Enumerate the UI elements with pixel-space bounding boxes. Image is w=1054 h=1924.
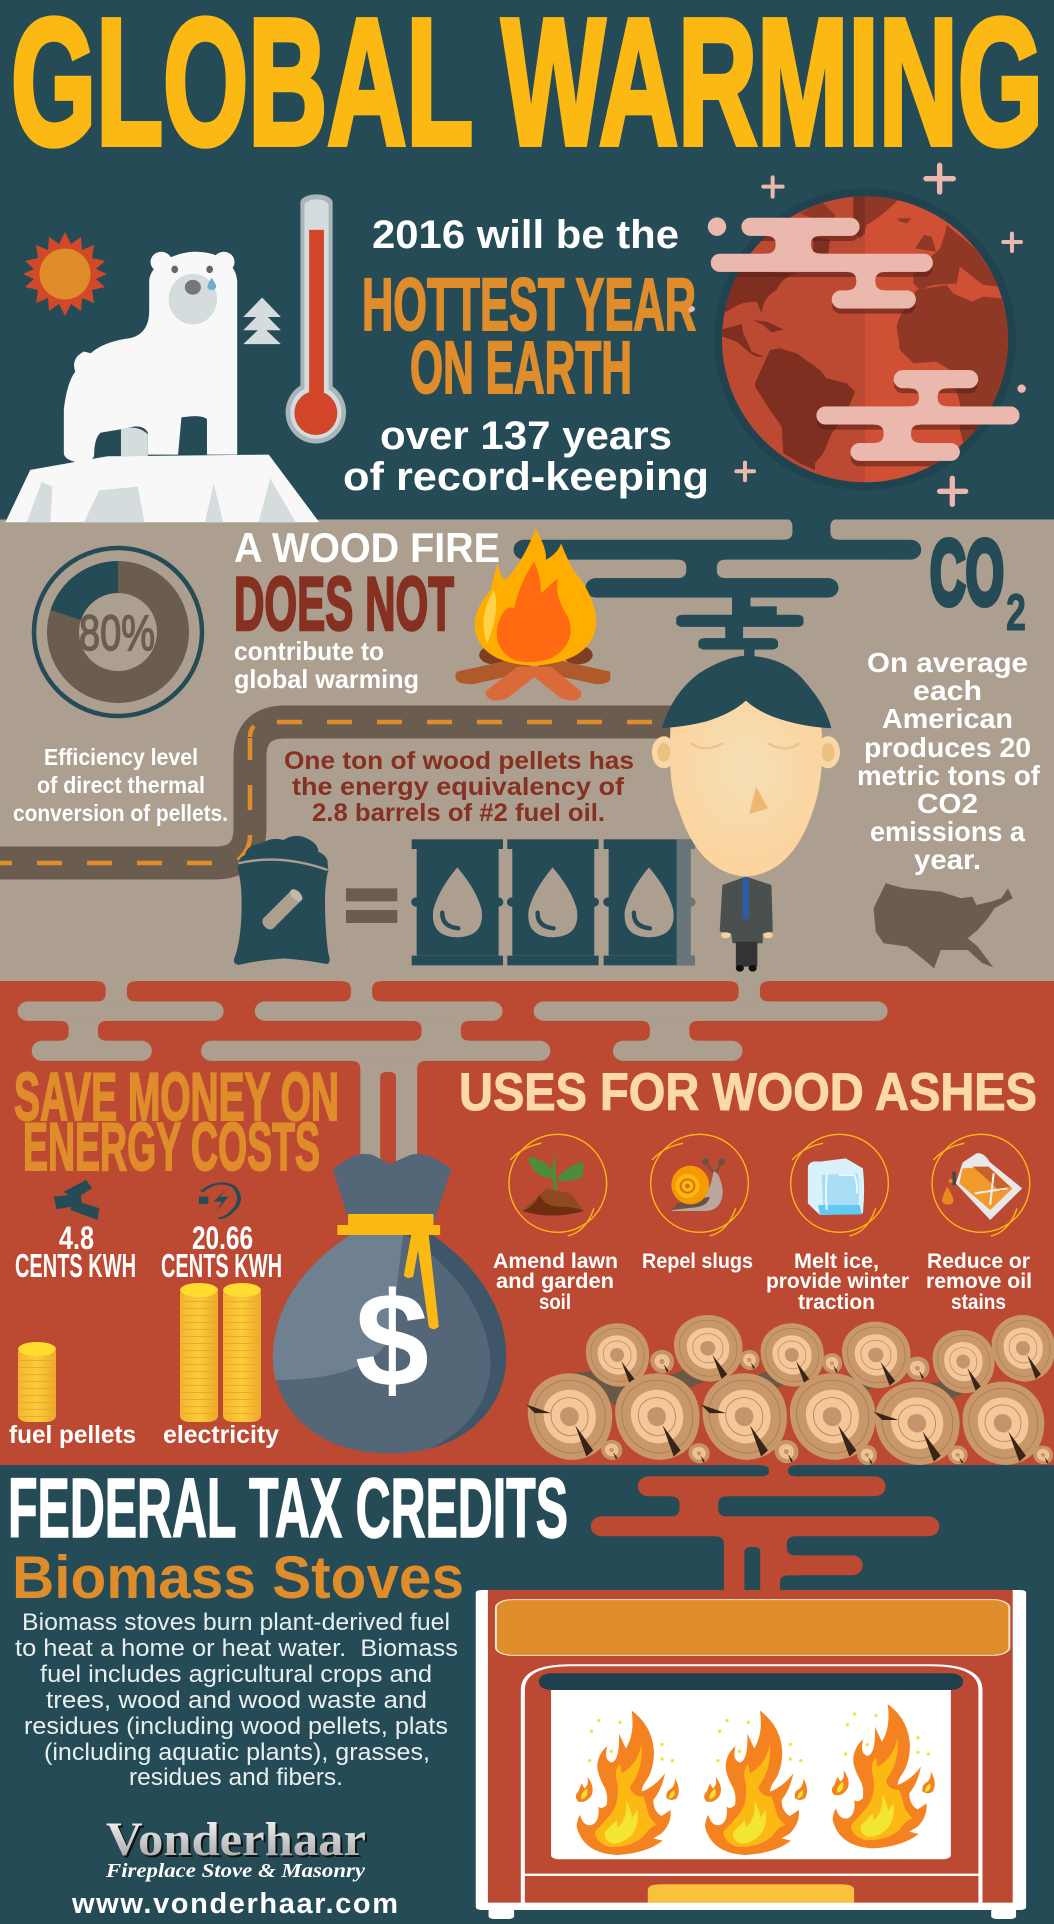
labels: wood ash uses: soil [539,1291,571,1314]
text: american emissions: metric tons of [857,760,1041,791]
labels: wood ash uses: Reduce or [927,1250,1030,1273]
text: biomass description: to heat a home or heat water. Biomass [15,1635,458,1662]
stat: pellet and electricity cost: CENTS KWH [161,1247,282,1284]
text: american emissions: produces 20 [864,732,1031,763]
icon: campfire [455,528,611,701]
small cloud dot [677,305,695,313]
text: american emissions: CO2 [917,788,978,819]
icon: polar bear on iceberg [5,252,319,522]
chart: 80% efficiency donut: 80% [79,605,155,661]
text: american emissions: On average [867,647,1028,678]
icon: biomass stove [476,1590,1026,1919]
text: biomass description: residues (including wood pellets, plats [24,1713,448,1740]
teal smoke rising from head [514,518,921,658]
heading: 2016 will be the hottest year: over 137 years [380,414,672,458]
text: efficiency level: Efficiency level [44,744,198,770]
labels: fuel pellets, electricity [9,1421,279,1449]
chart: 80% efficiency donut [34,548,202,716]
heading: 2016 will be the hottest year: ON EARTH [410,326,632,409]
text: biomass description: residues and fibers. [129,1764,343,1791]
icon: money bag [273,1154,506,1453]
stat: pellet and electricity cost: 20.66 [192,1220,253,1256]
dollar sign: $ [355,1266,429,1415]
icon: thermometer [286,194,346,443]
text: wood pellet equivalency: One ton of wood pellets has [284,747,634,775]
heading: CO2: 2 [1006,584,1026,642]
icon: wood log pile [526,1315,1054,1465]
labels: fuel pellets, electricity: electricity [163,1421,279,1449]
labels: wood ash uses: and garden [496,1270,614,1293]
labels: fuel pellets, electricity: fuel pellets [9,1421,136,1449]
icon: sprout [509,1134,607,1236]
heading: a wood fire does not: contribute to [234,636,384,666]
labels: wood ash uses: Repel slugs [642,1250,753,1273]
labels: wood ash uses: stains [951,1291,1006,1314]
icon: ice cube [791,1134,888,1236]
tan smoke into money bag [18,981,887,1163]
labels: wood ash uses: Amend lawn [493,1250,618,1273]
red smoke into stove [591,1465,939,1590]
heading: a wood fire does not: A WOOD FIRE [234,524,500,571]
heading: 2016 will be the hottest year: of record-keeping [343,455,709,499]
text: biomass description: fuel includes agricultural crops and [40,1661,432,1688]
stat: pellet and electricity cost: 4.8 [59,1220,94,1256]
icon: small pine tree [243,297,281,344]
text: american emissions: year. [914,844,981,875]
heading: save money on energy costs: SAVE MONEY ON [14,1059,339,1135]
heading: CO2 [930,522,1026,642]
logo: vonderhaar: Vonderhaar [108,1815,368,1868]
labels: wood ash uses [493,1250,1032,1314]
logo: vonderhaar: Fireplace Stove & Masonry [105,1860,365,1882]
heading: biomass stoves: Biomass Stoves [12,1544,464,1611]
icon: sun [23,232,107,316]
text: wood pellet equivalency: the energy equivalency of [292,773,625,801]
road [0,722,680,863]
labels: wood ash uses: remove oil [926,1270,1032,1293]
icon: pellet logs [54,1180,99,1220]
text: biomass description: Biomass stoves burn plant-derived fuel [22,1609,450,1636]
text: wood pellet equivalency [284,747,634,827]
chart: coin stacks [18,1283,261,1422]
icon: three flames in stove window [576,1704,935,1855]
heading: save money on energy costs: ENERGY COSTS [23,1109,320,1185]
text: efficiency level: conversion of pellets. [13,800,228,826]
icon: snail [651,1134,748,1236]
icon: man with smoke [652,656,840,972]
icon: bag of pellets [234,836,330,965]
text: efficiency level [13,744,228,826]
heading: 2016 will be the hottest year [343,213,709,499]
stat: pellet and electricity cost [15,1220,282,1284]
icon: plus-shaped stars [734,163,1023,507]
text: american emissions: each [913,675,982,706]
icon: globe with clouds [708,188,1026,490]
heading: a wood fire does not: global warming [234,664,419,694]
text: biomass description: trees, wood and wood waste and [46,1687,427,1714]
heading: save money on energy costs [14,1059,339,1185]
text: biomass description: (including aquatic plants), grasses, [44,1739,430,1766]
heading: a wood fire does not [234,524,500,694]
website url: www.vonderhaar.com [71,1888,398,1920]
text: american emissions: American [882,703,1013,734]
icon: USA map [874,883,1013,968]
text: efficiency level: of direct thermal [37,772,205,798]
icon: equals sign [346,888,397,923]
icon: electric plug and bolt [199,1183,239,1218]
icon: three oil barrels [411,839,695,965]
text: american emissions: emissions a [870,816,1025,847]
text: american emissions [857,647,1041,875]
heading: federal tax credits: FEDERAL TAX CREDITS [8,1461,568,1555]
heading: a wood fire does not: DOES NOT [234,562,454,647]
labels: wood ash uses: provide winter [766,1270,909,1293]
icon: oil stain remover [932,1134,1030,1236]
text: biomass description [15,1609,458,1791]
stat: pellet and electricity cost: CENTS KWH [15,1247,136,1284]
labels: wood ash uses: Melt ice, [794,1250,879,1273]
logo: vonderhaar: Vonderhaar [106,1813,366,1866]
heading: 2016 will be the hottest year: 2016 will be the [372,213,679,257]
text: wood pellet equivalency: 2.8 barrels of #2 fuel oil. [312,799,605,827]
red section background [0,981,1054,1465]
labels: wood ash uses: traction [798,1291,875,1314]
heading: 2016 will be the hottest year: HOTTEST YEAR [362,263,696,346]
tan section background [0,520,1054,981]
